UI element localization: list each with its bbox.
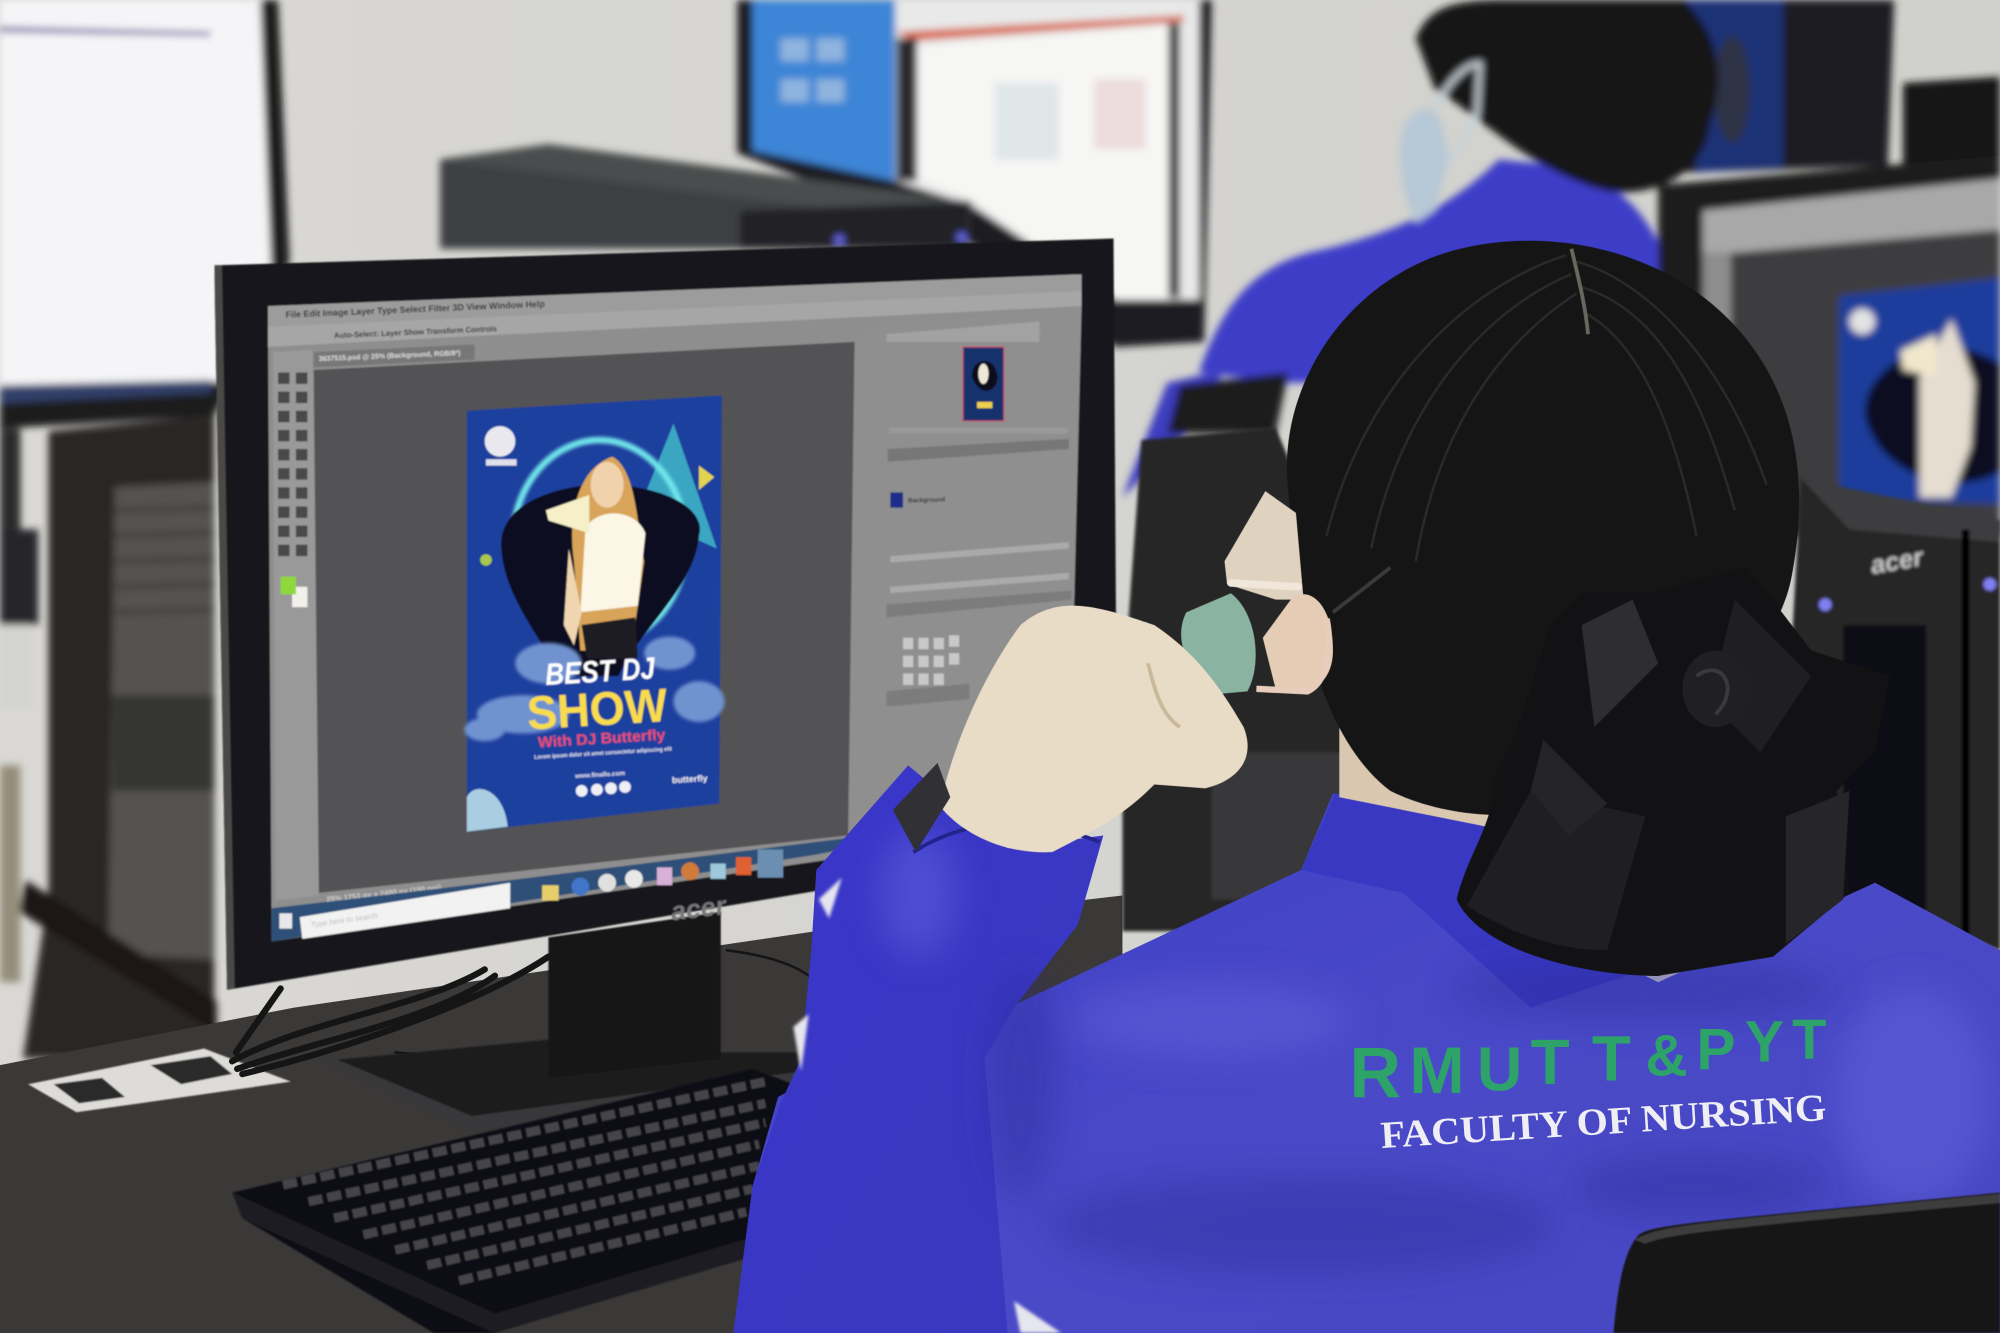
ear [1263,594,1333,693]
toolbar [273,350,319,901]
signature: butterfly [672,773,708,785]
embroidered text [1349,1008,1827,1157]
neck [1339,714,1505,829]
RMUTT&PYT: T [1531,1026,1570,1098]
RMUTT&PYT: R [1349,1033,1401,1113]
dark PC towers right [1122,427,2000,950]
face [1224,491,1304,600]
clouds [464,637,724,741]
RMUTT&PYT: U [1477,1035,1522,1105]
PC tower: behind monitor [440,144,972,249]
right panel [848,306,1082,852]
jacket [733,765,2000,1333]
background: computers and classmate [0,0,2000,1059]
status bar: 25% 1753 px x 2480 px (150 ppi) [326,883,442,904]
RMUTT&PYT: M [1409,1034,1465,1108]
torso [733,793,2000,1333]
cuff strap [893,763,950,852]
woman with megaphone [546,457,645,658]
canvas area [314,342,855,893]
face mask [1181,583,1329,695]
hair clip [1333,568,1390,612]
screen: File Edit Image Layer Type Select Filter 3D View Window Help [285,299,546,320]
logo [485,426,517,466]
colour swatches [281,577,307,607]
RMUTT&PYT: & [1645,1023,1688,1088]
options bar [268,291,1082,347]
poster: Best DJ Show [464,395,724,832]
screen: Auto-Select: Layer Show Transform Controls [334,324,497,340]
social icons [576,781,631,797]
tower: right with acer logo [1792,478,2000,950]
hair bow [1457,568,1890,976]
monitor: top left [0,0,290,536]
collar [1301,793,1645,1008]
FACULTY OF NURSING: FACULTY OF NURSING [1379,1087,1827,1157]
main monitor [214,239,1116,990]
fold shading [987,955,1837,1276]
sleeve stripes [793,878,1061,1333]
document tab [314,344,474,367]
RMUTT&PYT: T [1592,1022,1631,1094]
right panel: Background [908,496,945,505]
menu bar [268,274,1082,327]
tower: behind hand [1122,427,1352,931]
desk [0,895,1122,1333]
computer: monitor on right [1658,156,2000,536]
RMUTT&PYT: T [1792,1008,1826,1071]
headline text: SHOW [525,679,669,741]
taskbar: Type here to search [310,911,378,929]
left shelf [0,415,217,1059]
hair [1287,241,1799,815]
headline text: With DJ Butterfly [537,727,666,751]
brand logo: acer [669,890,729,927]
screen: 3637515.psd @ 25% (Background, RGB/8*) [319,350,461,363]
taskbar [272,836,867,941]
sleeve [733,765,1103,1333]
chair back: behind subject [1167,372,1288,434]
sleeve cuff line [913,824,1099,852]
tower: right with acer logo: acer [1869,543,1927,580]
RMUTT&PYT: P [1696,1017,1736,1082]
screen [268,274,1082,941]
corner circle [467,789,508,832]
RMUTT&PYT: Y [1745,1009,1784,1074]
monitor bezel [214,239,1116,990]
far right equipment [1684,0,2000,172]
monitor: top centre [737,0,1212,347]
cables [232,950,816,1097]
headline text: www.finallo.com [574,770,626,780]
keyboard [232,1069,793,1333]
chair back: foreground [1614,1193,2000,1333]
hand [940,606,1248,852]
classmate in background [1122,0,1718,497]
monitor stand [321,912,801,1133]
black shape [501,485,700,676]
subject: student [733,241,2000,1333]
neon triangle [638,424,717,549]
headline text [525,651,672,780]
cable grommet [28,1049,291,1112]
headline text: Lorem ipsum dolor sit amet consectetur adipiscing elit [534,747,672,761]
highlights [880,829,1990,1205]
headline text: BEST DJ [544,651,657,692]
neon ring [513,440,686,644]
